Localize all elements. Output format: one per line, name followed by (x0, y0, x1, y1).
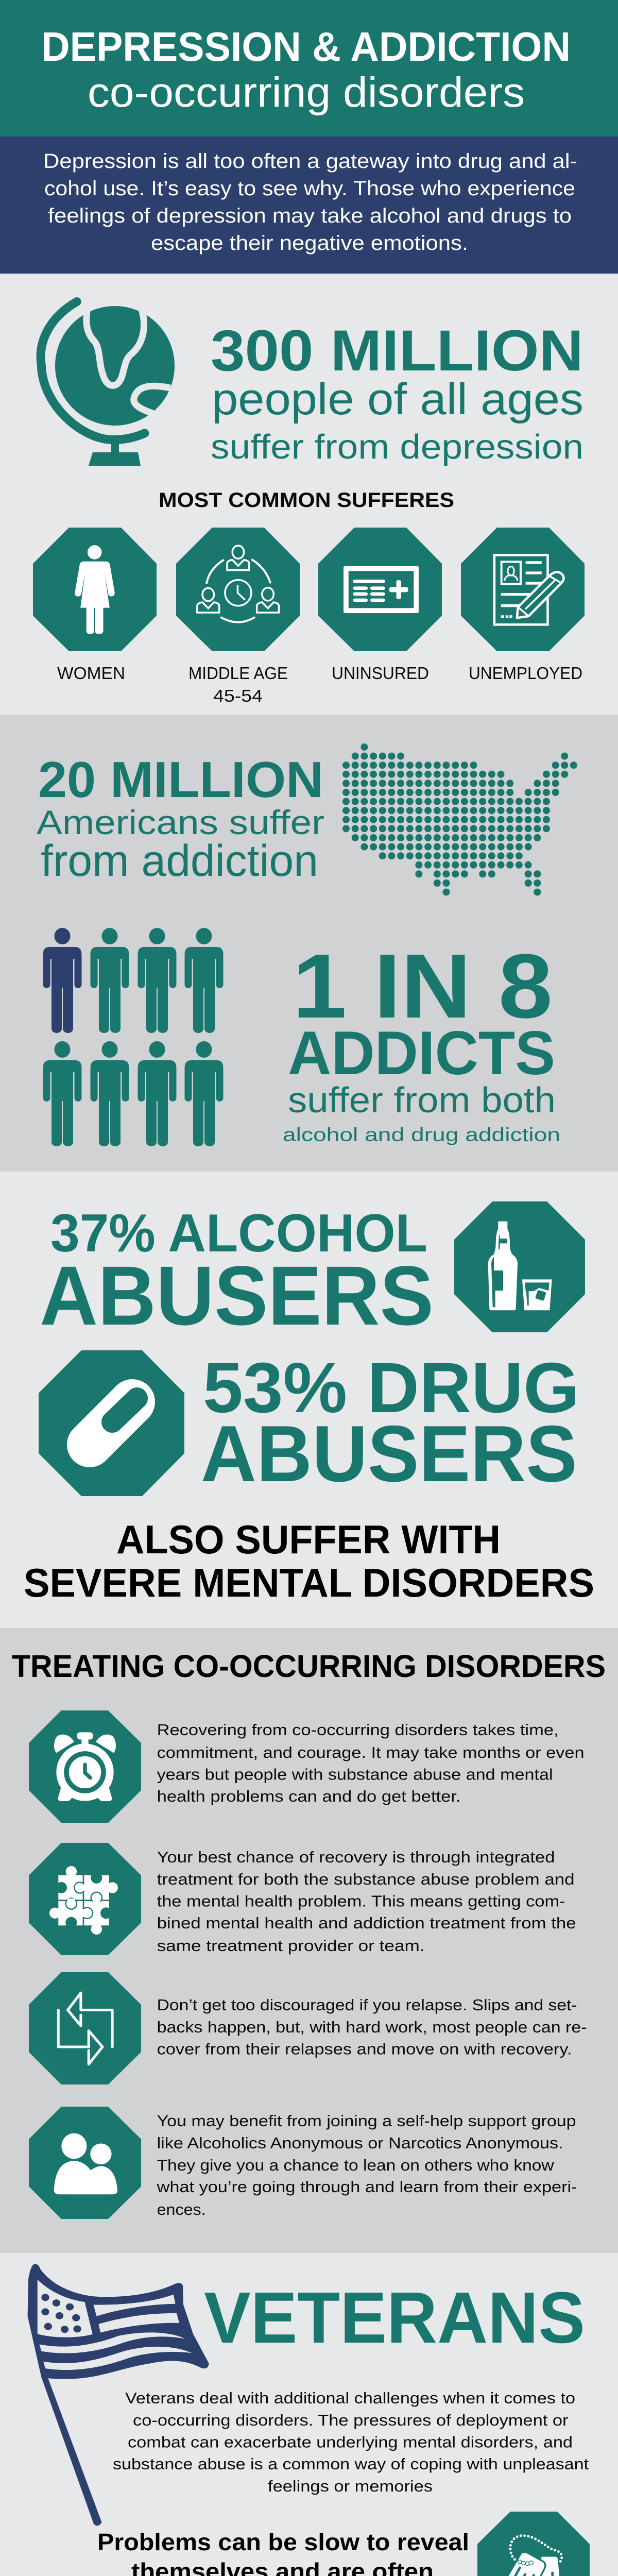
stat: 53% drug abusers: ABUSERS (201, 1409, 577, 1498)
text: recovery takes time: commitment, and courage. It may take months or even (157, 1743, 585, 1761)
stat: 1 in 8 addicts: ADDICTS (288, 1019, 555, 1088)
icon: puzzle (29, 1843, 141, 1955)
stat: 20 million: Americans suffer (37, 803, 324, 841)
heading: most common sufferes: MOST COMMON SUFFERES (159, 489, 454, 512)
stat: 1 in 8 addicts: suffer from both (288, 1080, 556, 1120)
panel: 300 million and most common sufferers (0, 274, 618, 715)
text: veterans challenges: Veterans deal with additional challenges when it comes to (125, 2389, 575, 2407)
stat: 37% alcohol abusers (40, 1204, 434, 1343)
text: integrated treatment (157, 1848, 576, 1955)
text: self-help support group: ences. (157, 2200, 206, 2218)
text: veterans challenges (113, 2389, 589, 2495)
icon: support group people (29, 2107, 141, 2219)
text: recovery takes time: Recovering from co-occurring disorders takes time, (157, 1721, 559, 1739)
stat: 1 in 8 addicts (283, 935, 560, 1145)
stat: 300 million: people of all ages (212, 375, 583, 424)
icon: alarm clock (29, 1710, 141, 1823)
subtitle: co-occurring disorders (88, 69, 525, 116)
text: self-help support group (156, 2112, 577, 2218)
stat: 20 million: 20 MILLION (38, 751, 323, 808)
text: recovery takes time (157, 1721, 585, 1805)
icon: women (33, 528, 157, 651)
icon: dog tags (477, 2512, 590, 2576)
stat: 20 million (37, 751, 324, 886)
panel: introduction: Depression is all too often a gateway into drug and al- (43, 150, 577, 173)
text: veterans challenges: substance abuse is a common way of coping with unpleasant (113, 2455, 589, 2473)
text: integrated treatment: same treatment provider or team. (157, 1937, 425, 1955)
panel: introduction: cohol use. It’s easy to see why. Those who experience (44, 177, 575, 200)
callout: also suffer with severe mental disorders: SEVERE MENTAL DISORDERS (24, 1560, 594, 1605)
callout: problems can be slow to reveal: Problems can be slow to reveal (97, 2529, 469, 2555)
icon: American flag (28, 2264, 209, 2526)
panel: title banner (0, 0, 618, 137)
stat: 37% alcohol abusers: ABUSERS (40, 1248, 434, 1343)
text: relapse (157, 1996, 587, 2058)
icon: bottle and glass (454, 1201, 585, 1332)
stat: 20 million: from addiction (41, 836, 318, 886)
icon: middle age group (176, 528, 300, 651)
panel: treating co-occurring disorders (0, 1628, 618, 2253)
text: integrated treatment: bined mental health and addiction treatment from the (157, 1914, 576, 1932)
panel: addiction statistics (0, 715, 618, 1172)
heading: veterans: VETERANS (204, 2277, 585, 2358)
icon: uninsured card (318, 528, 442, 651)
heading: treating co-occurring disorders: TREATING CO-OCCURRING DISORDERS (12, 1649, 606, 1684)
callout: problems can be slow to reveal (97, 2529, 469, 2576)
label: women: WOMEN (57, 664, 125, 683)
stat: 300 million: 300 MILLION (211, 318, 583, 383)
label: uninsured: UNINSURED (332, 664, 429, 683)
panel: introduction (0, 137, 618, 274)
text: recovery takes time: years but people with substance abuse and mental (157, 1765, 553, 1784)
text: veterans challenges: feelings or memories (268, 2477, 433, 2495)
stat: 53% drug abusers: 53% DRUG (203, 1348, 579, 1428)
text: self-help support group: You may benefit from joining a self-help support group (157, 2112, 576, 2130)
text: recovery takes time: health problems can and do get better. (157, 1787, 461, 1805)
label: middle age 45-54: 45-54 (213, 686, 263, 705)
text: relapse: backs happen, but, with hard work, most people can re- (157, 2018, 587, 2036)
stat: 1 in 8 addicts: alcohol and drug addiction (283, 1124, 560, 1145)
title: DEPRESSION & ADDICTION (41, 24, 571, 70)
text: veterans challenges: combat can exacerbate underlying mental disorders, and (128, 2433, 573, 2451)
panel: introduction: escape their negative emotions. (151, 232, 468, 255)
icon: eight people, one highlighted (43, 928, 224, 1146)
text: integrated treatment: Your best chance of recovery is through integrated (157, 1848, 555, 1866)
text: integrated treatment: the mental health problem. This means getting com- (157, 1892, 565, 1910)
text: relapse: Don’t get too discouraged if you relapse. Slips and set- (157, 1996, 577, 2014)
text: relapse: cover from their relapses and move on with recovery. (157, 2040, 572, 2058)
icon: unemployed application (461, 528, 585, 651)
callout: also suffer with severe mental disorders: ALSO SUFFER WITH (116, 1517, 501, 1562)
stat: 37% alcohol abusers: 37% ALCOHOL (50, 1204, 427, 1263)
stat: 1 in 8 addicts: 1 IN 8 (293, 935, 553, 1037)
panel: veterans (0, 2253, 618, 2576)
label: middle age 45-54 (188, 664, 288, 705)
text: self-help support group: like Alcoholics Anonymous or Narcotics Anonymous. (157, 2134, 563, 2152)
text: self-help support group: They give you a chance to lean on others who know (157, 2156, 554, 2174)
icon: pill (39, 1350, 184, 1496)
icon: globe (41, 301, 175, 466)
text: veterans challenges: co-occurring disorders. The pressures of deployment or (133, 2411, 569, 2429)
stat: 300 million (211, 318, 583, 466)
text: self-help support group: what you’re going through and learn from their experi- (156, 2178, 577, 2196)
callout: also suffer with severe mental disorders (24, 1517, 594, 1605)
icon: dotted USA map (346, 747, 574, 892)
icon: reversing arrows (29, 1972, 141, 2084)
stat: 300 million: suffer from depression (211, 428, 583, 466)
label: middle age 45-54: MIDDLE AGE (188, 664, 288, 683)
panel: introduction: feelings of depression may take alcohol and drugs to (48, 205, 572, 227)
stat: 53% drug abusers (201, 1348, 579, 1498)
label: unemployed: UNEMPLOYED (469, 664, 582, 683)
text: integrated treatment: treatment for both the substance abuse problem and (157, 1870, 575, 1888)
panel: alcohol and drug abusers (0, 1172, 618, 1628)
